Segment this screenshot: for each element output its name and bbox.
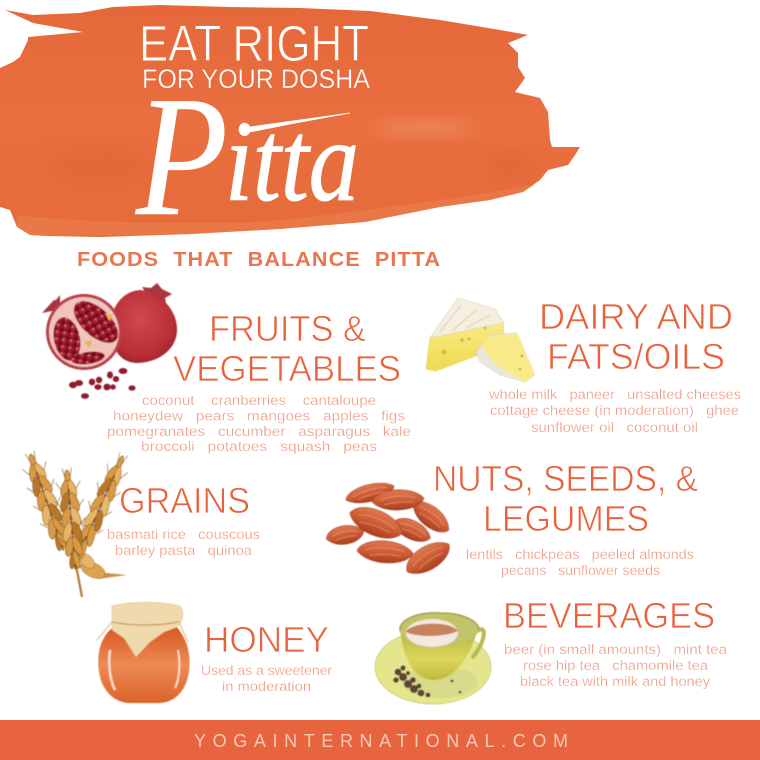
almond [356,539,414,565]
icon: cut pomegranate [42,294,125,370]
jar body [98,626,190,703]
list: grains: basmati rice couscous [107,527,260,542]
icon: small cheese wedge [476,333,535,382]
icon: cheese [426,298,535,382]
heading: beverages: BEVERAGES [503,595,715,636]
list: grains [107,527,260,558]
list: dairy and fats/oils: sunflower oil coconut oil [531,420,698,435]
icon: pomegranates [42,283,177,399]
title: Eat Right: EAT RIGHT [139,15,369,72]
middle wheat ear [52,467,90,571]
icon: cup of tea [375,613,491,704]
heading: dairy and fats/oils: DAIRY AND [539,296,733,337]
right wheat ear [66,449,135,564]
icon: whole pomegranate [111,283,177,363]
almond [408,495,455,538]
almond [390,513,434,547]
list: dairy and fats/oils: whole milk paneer unsalted cheeses [488,387,741,402]
heading: fruits and vegetables: VEGETABLES [173,348,401,389]
icon: wheat [16,448,135,597]
list: nuts, seeds and legumes: pecans sunflower seeds [501,563,660,578]
almond [401,535,455,581]
title: Pitta script: itta [225,98,359,226]
title: Pitta script [135,62,359,252]
cup handle [472,629,484,658]
list: dairy and fats/oils [488,387,741,435]
watercolor brush stroke banner [0,5,580,237]
heading: fruits and vegetables [173,308,401,389]
heading: nuts, seeds and legumes [433,458,698,539]
list: dairy and fats/oils: cottage cheese (in moderation) ghee [490,403,739,418]
almond [345,501,407,545]
title: Pitta script: P [135,62,228,252]
list: fruits and vegetables: honeydew pears mangoes apples figs [113,408,405,424]
spilled tea leaves [393,665,461,697]
list: fruits and vegetables: coconut cranberries cantaloupe [142,393,376,408]
list: beverages: beer (in small amounts) mint tea [504,642,728,657]
heading: grains: GRAINS [119,480,250,521]
text: honey note: in moderation [222,679,311,694]
text: honey note [201,663,333,694]
list: beverages [504,642,728,689]
list: fruits and vegetables: broccoli potatoes squash peas [141,439,377,454]
jar cloth lid [112,602,183,657]
list: nuts, seeds and legumes [466,547,694,578]
list: fruits and vegetables [107,393,411,454]
footer band [0,720,760,760]
heading: nuts, seeds and legumes: NUTS, SEEDS, & [433,458,698,499]
cup body [400,628,478,680]
heading: dairy and fats/oils [539,296,733,377]
list: fruits and vegetables: pomegranates cucumber asparagus kale [107,424,411,439]
almond [344,478,396,508]
heading: honey: HONEY [204,619,329,660]
footer url: YOGAINTERNATIONAL.COM [194,731,568,751]
heading: fruits and vegetables: FRUITS & [209,308,366,349]
wheat stems [75,551,127,597]
list: grains: barley pasta quinoa [115,543,253,558]
almond [372,488,424,511]
subtitle: For Your Dosha: FOR YOUR DOSHA [142,64,370,94]
list: beverages: black tea with milk and honey [520,674,710,689]
text: honey note: Used as a sweetener [201,663,333,678]
section heading: foods that balance pitta: FOODS THAT BALANCE PITTA [77,248,441,271]
left wheat ear [16,448,77,555]
list: beverages: rose hip tea chamomile tea [523,658,709,673]
icon: loose seeds [69,368,136,399]
heading: dairy and fats/oils: FATS/OILS [547,336,725,377]
heading: nuts, seeds and legumes: LEGUMES [483,498,649,539]
icon: honey jar [97,602,190,703]
icon: almonds [325,478,455,581]
almond [325,523,365,547]
cup rim and tea [399,613,479,647]
icon: large cheese wedge [426,298,505,371]
saucer [375,630,491,704]
list: nuts, seeds and legumes: lentils chickpeas peeled almonds [466,547,694,562]
